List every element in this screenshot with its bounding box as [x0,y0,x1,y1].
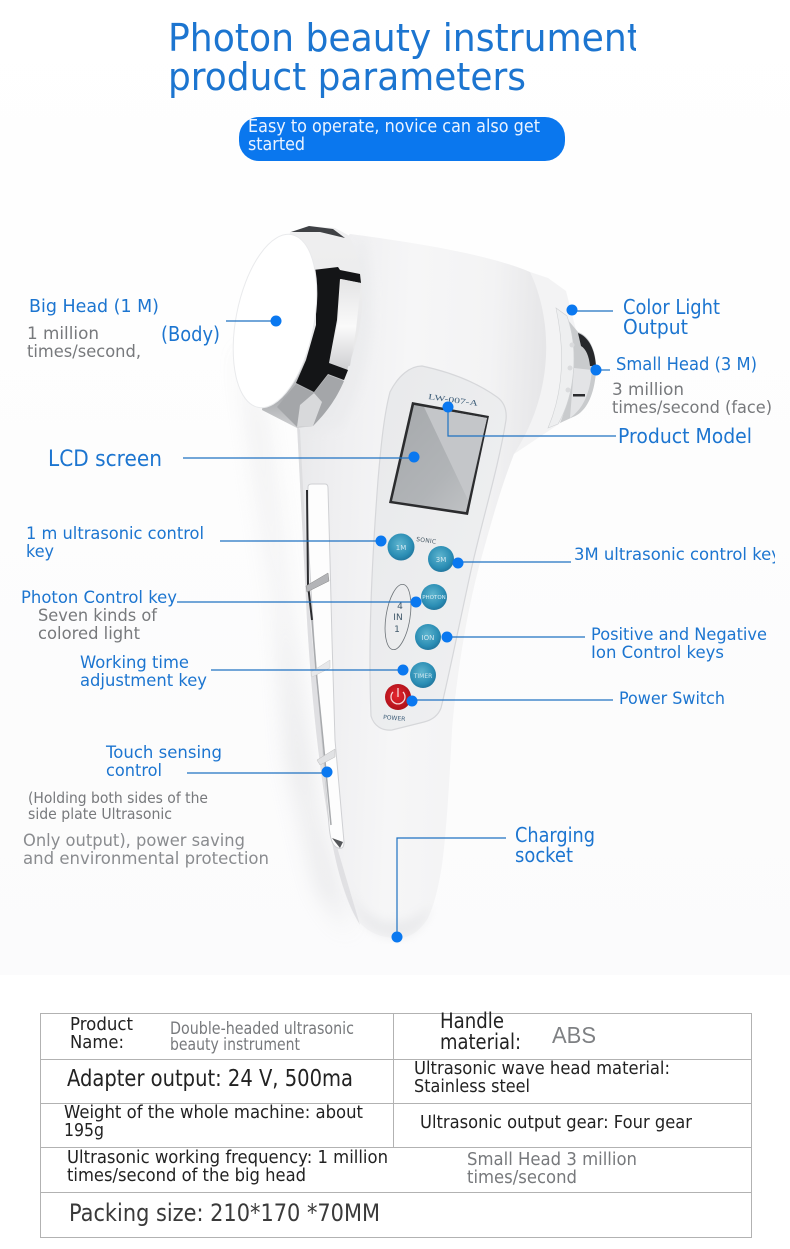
row: frequency: times/second of the big head [67,1165,306,1186]
label: touch control: side plate Ultrasonic [28,805,172,823]
label: big head: times/second, [27,342,141,362]
callout: LCD screen [183,452,420,462]
label: 1M key [26,524,204,562]
row: adapter and head material: Adapter output: 24 V, 500ma [67,1066,353,1092]
subtitle pill: started [248,134,305,155]
row: weight and gear: Ultrasonic output gear: Four gear [420,1112,693,1133]
product: ultrasonic device [220,226,596,938]
label: timer key [80,653,207,691]
label: touch control: Touch sensing [105,743,222,763]
body shading: handle edge [297,425,360,925]
callout: 3M key [452,558,571,568]
row: weight and gear: Weight of the whole machine: about [64,1102,363,1123]
label: charging socket: socket [515,843,573,867]
callout: timer key [211,664,408,676]
button: 1M [388,534,414,560]
button: ion: ION [422,634,434,642]
row: adapter and head material: Stainless steel [414,1076,530,1097]
row: frequency [67,1147,637,1188]
4 in 1 badge: 1 [394,625,400,635]
row: adapter and head material [67,1058,670,1097]
label: small head [612,354,772,418]
button: photon: PHOTON [422,595,446,601]
device body [280,234,546,938]
label: touch control [23,743,269,869]
callout: ion key [442,632,585,642]
row: frequency: Small Head 3 million [467,1149,637,1170]
title [168,16,641,99]
label: LCD screen: LCD screen [48,447,162,472]
label: touch control: and environmental protection [23,849,269,869]
label: charging socket [515,823,595,867]
row: packing size: Packing size: 210*170 *70MM [69,1199,380,1227]
row: name and handle: material: [440,1030,521,1054]
device shadow [240,340,350,935]
subtitle pill: Easy to operate, novice can also get [248,116,540,137]
neck ring [514,272,578,454]
row: weight and gear [64,1102,693,1141]
label: small head: Small Head (3 M) [616,354,757,375]
label: touch control: (Holding both sides of the [28,789,208,807]
label: small head: 3 million [612,380,684,400]
label: 3M key: 3M ultrasonic control key [574,545,781,565]
label: timer key: adjustment key [80,671,207,691]
4 in 1 badge [381,583,415,651]
row: frequency: times/second [467,1167,577,1188]
label: big head: 1 million [27,324,99,344]
body shading: bottom [345,880,432,938]
callout: small head [590,364,610,376]
button: 1M: 1M [396,544,406,552]
label: ion key: Positive and Negative [591,625,767,645]
button: 3M: 3M [436,556,446,564]
row: weight and gear: 195g [64,1120,104,1141]
label: color light: Output [623,315,688,339]
label: power switch: Power Switch [619,689,725,709]
callout: product model [442,402,616,436]
callout: charging socket [392,838,506,942]
4 in 1 badge: 4 [397,602,403,612]
button: power [383,684,411,723]
button: 3M [428,546,454,572]
row: frequency: Ultrasonic working frequency: 1 million [67,1147,388,1168]
callout: big head [226,316,282,326]
row: name and handle: Name: [70,1032,124,1053]
label: big head: (Body) [161,322,220,346]
row: name and handle [70,1009,596,1055]
small head chrome [548,308,596,428]
label: timer key: Working time [80,653,189,673]
label: small head: times/second (face) [612,398,772,418]
title: product parameters [168,55,526,99]
label: photon key: Seven kinds of [38,606,158,626]
button: timer: TIMER [413,673,432,680]
label: touch control: Only output), power saving [23,831,245,851]
label: 1M key: 1 m ultrasonic control [26,524,204,544]
big head disk [220,227,330,415]
button: timer [410,662,436,688]
label: touch control: control [106,761,162,781]
row: name and handle: Product [70,1014,133,1035]
subtitle pill [239,116,565,161]
label: ion key: Ion Control keys [591,643,724,663]
4 in 1 badge: IN [393,613,403,623]
big head chrome ring [262,226,363,428]
callout: power switch [406,696,613,706]
side touch strip [306,484,344,848]
callout: photon key [177,596,422,608]
label: big head: Big Head (1 M) [29,296,159,317]
row: name and handle: Handle [440,1009,504,1033]
LCD screen [389,402,489,515]
parameter table [40,1009,752,1238]
button: ion [415,624,441,650]
button: power: POWER [383,714,406,723]
label: 1M key: key [26,542,54,562]
label: color light: Color Light [623,295,720,319]
model text: LW-007-A [428,392,479,408]
label: photon key [21,588,177,644]
body shading: head seam [300,240,372,432]
title: Photon beauty instrument [168,16,641,60]
button: photon [421,584,447,610]
label: charging socket: Charging [515,823,595,847]
table grid [40,1013,752,1238]
control panel [370,366,506,730]
sonic label: SONIC [416,536,437,546]
row: name and handle: beauty instrument [170,1035,300,1055]
label: product model: Product Model [618,424,752,448]
label: photon key: colored light [38,624,140,644]
label: big head [27,296,220,362]
callout: 1M key [220,536,386,546]
callout: color light [566,304,613,316]
label: color light [623,295,720,339]
row: name and handle: Double-headed ultrasonic [170,1019,354,1039]
photo background [0,0,790,975]
label: photon key: Photon Control key [21,588,177,608]
callout: touch control [187,766,332,778]
row: name and handle: ABS [552,1022,596,1048]
label: ion key [591,625,767,663]
row: adapter and head material: Ultrasonic wave head material: [414,1058,670,1079]
